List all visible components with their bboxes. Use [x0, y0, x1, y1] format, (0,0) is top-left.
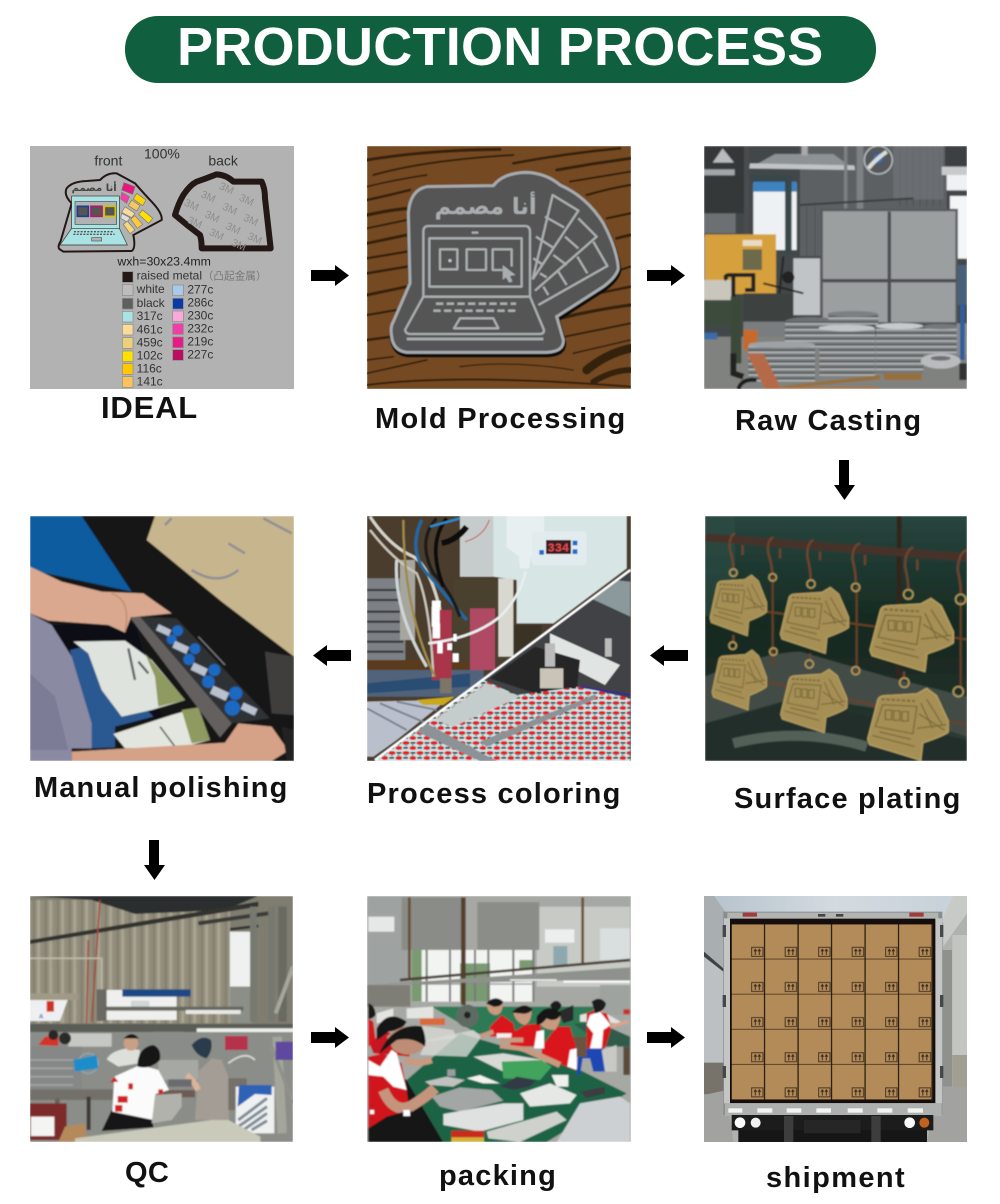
panel: ideal design artwork: front	[94, 153, 122, 169]
panel: ideal design artwork: 3M	[182, 197, 201, 214]
panel: ideal design artwork: 3M	[203, 209, 221, 226]
panel: ideal design artwork	[30, 146, 294, 389]
panel: ideal design artwork: 3M	[245, 230, 264, 247]
panel: ideal design artwork: 286c	[187, 296, 213, 310]
panel: ideal design artwork: raised metal	[137, 269, 202, 283]
panel: mold processing badge on wood: أنا مصمم	[435, 191, 537, 220]
panel: ideal design artwork: 141c	[137, 374, 163, 388]
panel: QC inspection workshop	[30, 896, 293, 1142]
arrow: surface plating to process coloring	[650, 645, 688, 666]
panel: ideal design artwork: 277c	[187, 282, 213, 296]
panel: ideal design artwork: 3M	[199, 189, 217, 206]
label: QC: QC	[125, 1157, 169, 1189]
panel: ideal design artwork: black	[137, 296, 166, 310]
panel: ideal design artwork: back	[208, 153, 239, 169]
panel: ideal design artwork: 232c	[187, 322, 213, 336]
panel: ideal design artwork: 3M	[229, 237, 248, 254]
panel: surface plating hanging badges	[705, 516, 967, 761]
panel: ideal design artwork: 230c	[187, 309, 213, 323]
panel: ideal design artwork: 227c	[187, 348, 213, 362]
panel: raw casting factory	[704, 146, 967, 389]
label: Mold Processing: Mold Processing	[375, 403, 627, 435]
panel: ideal design artwork: 3M	[241, 212, 260, 229]
panel: ideal design artwork: wxh=30x23.4mm	[116, 255, 211, 269]
title text: PRODUCTION PROCESS	[177, 17, 824, 77]
panel: ideal design artwork: 3M	[237, 192, 256, 209]
label: Manual polishing: Manual polishing	[34, 772, 288, 804]
arrow: manual polishing down to QC	[144, 840, 165, 880]
panel: packing workers at table	[367, 896, 631, 1142]
label: shipment: shipment	[766, 1162, 906, 1194]
label: packing: packing	[439, 1160, 557, 1192]
arrow: process coloring to manual polishing	[313, 645, 351, 666]
arrow: QC to packing	[311, 1027, 349, 1048]
arrow: mold to raw casting	[647, 265, 685, 286]
panel: ideal design artwork: 102c	[137, 348, 163, 362]
label: IDEAL: IDEAL	[101, 390, 198, 425]
arrow: raw casting down to surface plating	[834, 460, 855, 500]
panel: ideal design artwork: 3M	[220, 201, 239, 218]
panel: ideal design artwork: 3M	[217, 180, 236, 197]
panel: shipment truck loaded with cartons	[704, 896, 967, 1142]
panel: ideal design artwork: 317c	[137, 309, 163, 323]
arrow: packing to shipment	[647, 1027, 685, 1048]
panel: process coloring machines	[367, 516, 631, 761]
label: Raw Casting: Raw Casting	[735, 405, 922, 437]
label: Surface plating: Surface plating	[734, 783, 962, 815]
panel: ideal design artwork: 116c	[137, 361, 162, 375]
panel: process coloring machines: 334	[548, 541, 569, 555]
panel: ideal design artwork: （凸起金属）	[203, 270, 267, 283]
panel: ideal design artwork: white	[136, 282, 165, 296]
label: Process coloring: Process coloring	[367, 778, 622, 810]
panel: ideal design artwork: 3M	[224, 220, 242, 237]
panel: ideal design artwork: 3M	[185, 214, 204, 231]
panel: ideal design artwork: 461c	[137, 322, 163, 336]
title banner	[125, 16, 876, 83]
panel: ideal design artwork: أنا مصمم	[72, 181, 117, 194]
panel: QC inspection workshop: A	[39, 1015, 44, 1021]
panel: mold processing badge on wood	[367, 146, 631, 389]
panel: ideal design artwork: 459c	[137, 335, 163, 349]
panel: ideal design artwork: 3M	[207, 226, 226, 243]
panel: ideal design artwork: 219c	[187, 335, 213, 349]
panel: manual polishing	[30, 516, 294, 761]
arrow: ideal to mold	[311, 265, 349, 286]
